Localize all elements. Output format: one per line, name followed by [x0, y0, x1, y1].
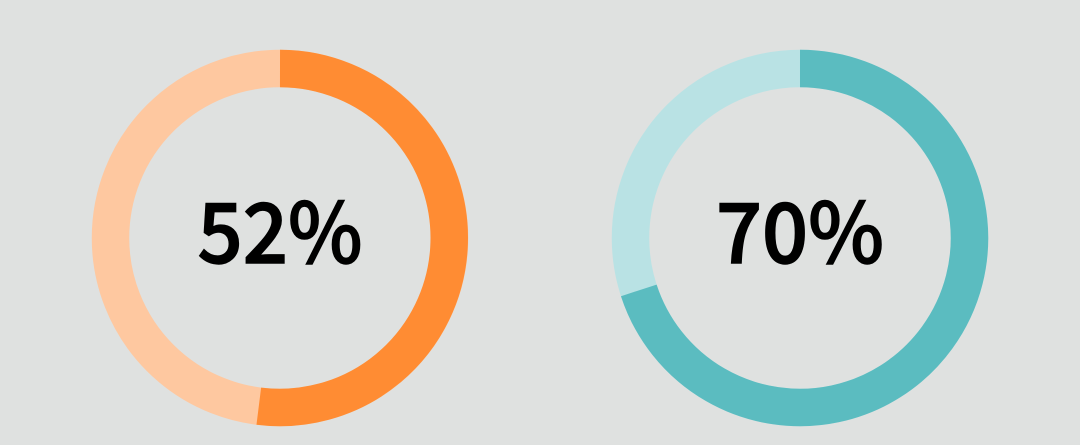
label: 70%: 70%	[716, 167, 884, 287]
donut chart: 70%	[630, 68, 970, 408]
donut chart: 52%	[110, 68, 450, 408]
label: 52%: 52%	[198, 167, 362, 287]
